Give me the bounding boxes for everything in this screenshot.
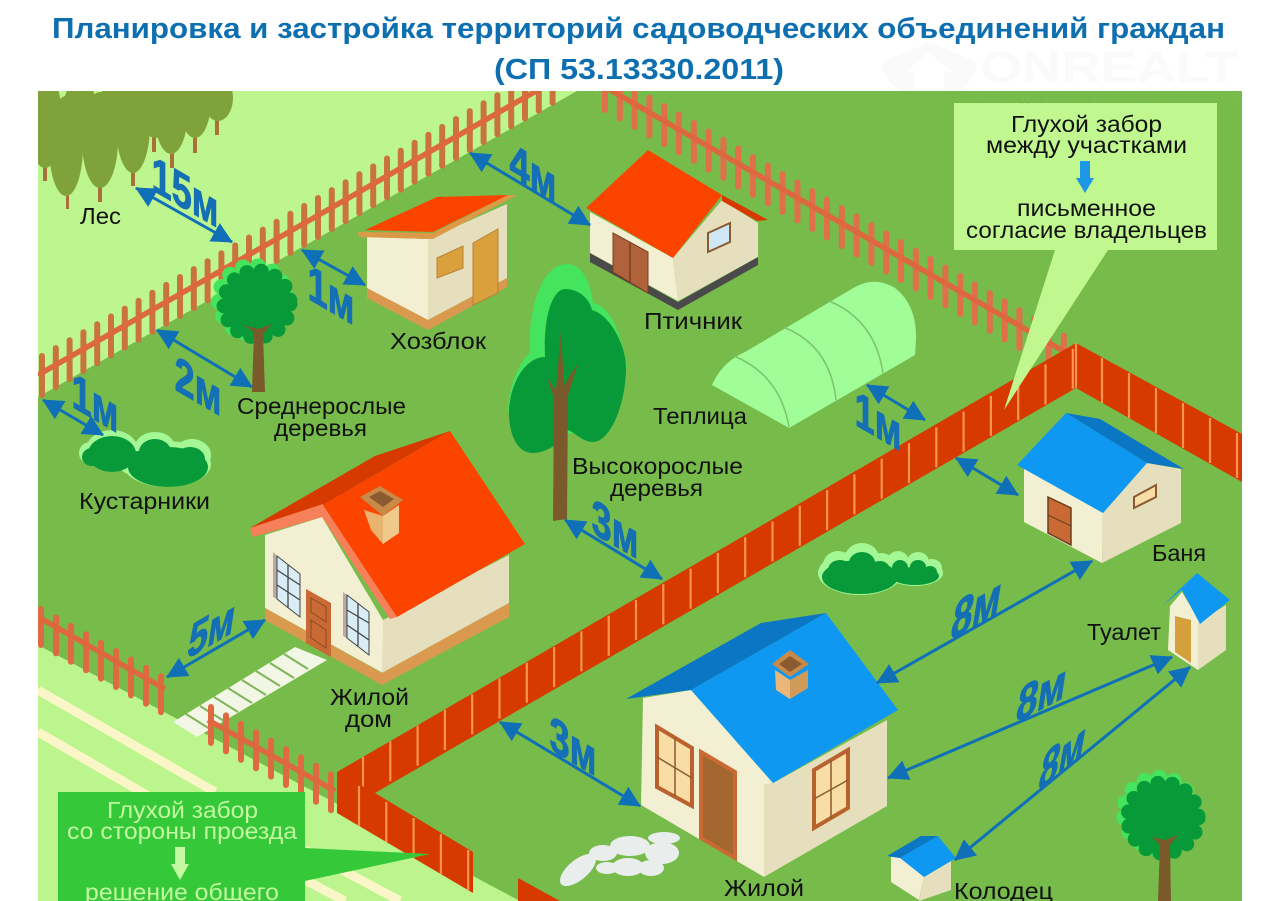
outbuilding — [358, 195, 517, 330]
stones — [560, 832, 680, 886]
medium tree — [219, 266, 290, 392]
distance labels: 15м — [152, 144, 218, 239]
distance labels — [72, 131, 1091, 805]
toilet — [1163, 573, 1230, 670]
right tree — [1124, 778, 1198, 901]
object labels: Лес — [80, 203, 121, 229]
solid red fence: road side — [337, 786, 473, 893]
well — [887, 836, 956, 901]
distance labels: 3м — [592, 487, 638, 570]
object labels: деревья — [274, 415, 367, 441]
walkway — [173, 647, 327, 737]
distance labels: 1м — [308, 253, 354, 336]
callout: top right: письменное — [1017, 195, 1156, 221]
forest trees — [38, 91, 233, 196]
solid red fence: lower fragment — [518, 878, 560, 901]
object labels: Птичник — [644, 308, 743, 334]
greenhouse — [712, 282, 916, 428]
callout: bottom left — [58, 792, 430, 901]
watermark: ONREALT — [980, 43, 1238, 92]
forest ground — [38, 91, 577, 397]
object labels: Жилой — [724, 875, 804, 901]
object labels: Баня — [1152, 540, 1206, 566]
watermark subtitle: НЕДВИЖИМОСТЬ — [975, 92, 1240, 104]
callout: top right — [954, 103, 1217, 410]
object labels: дом — [345, 706, 392, 732]
main house blue — [626, 613, 898, 877]
tall tree — [508, 264, 627, 521]
object labels: Среднерослые — [237, 393, 406, 419]
distance labels: 1м — [72, 361, 118, 444]
picket fence: rear side — [602, 91, 1067, 360]
main house red — [250, 431, 525, 685]
road — [38, 645, 520, 901]
title: (СП 53.13330.2011) — [494, 54, 784, 86]
object labels — [79, 203, 1206, 901]
distance arrows — [43, 153, 1190, 860]
title: Планировка и застройка территорий садоводческих объединений граждан — [52, 13, 1225, 45]
distance labels: 1м — [855, 379, 901, 462]
distance labels: 8м — [1035, 707, 1091, 805]
object labels: Жилой — [330, 684, 409, 710]
distance labels: 5м — [184, 587, 239, 670]
bush: left — [79, 430, 211, 487]
callout: top right: согласие владельцев — [966, 217, 1207, 243]
picket fence: forest side — [38, 91, 556, 398]
solid red fence: rear right — [1076, 343, 1242, 482]
object labels: Хозблок — [390, 328, 487, 354]
bush: right — [818, 543, 943, 595]
callout: top right: Глухой забор — [1011, 111, 1162, 137]
callout: top right: между участками — [986, 132, 1187, 158]
distance labels: 3м — [550, 704, 596, 787]
title — [52, 13, 1225, 86]
solid red fence: between plots — [337, 343, 1076, 813]
watermark — [882, 42, 1238, 108]
object labels: Теплица — [653, 403, 747, 429]
object labels: Кустарники — [79, 488, 210, 514]
distance labels: 8м — [1013, 652, 1071, 735]
distance labels: 4м — [510, 131, 556, 214]
distance labels: 8м — [947, 562, 1007, 654]
distance labels: 2м — [175, 344, 221, 427]
object labels: деревья — [610, 475, 703, 501]
object labels: Высокорослые — [572, 453, 743, 479]
object labels: Туалет — [1087, 619, 1161, 645]
picket fence: front middle — [208, 707, 335, 810]
bath house — [1017, 413, 1184, 563]
forest trunks — [43, 120, 219, 209]
picket fence: front left — [40, 609, 165, 712]
callout: bottom left: со стороны проезда — [67, 818, 297, 844]
callout: bottom left: Глухой забор — [107, 797, 258, 823]
poultry house — [586, 150, 768, 310]
